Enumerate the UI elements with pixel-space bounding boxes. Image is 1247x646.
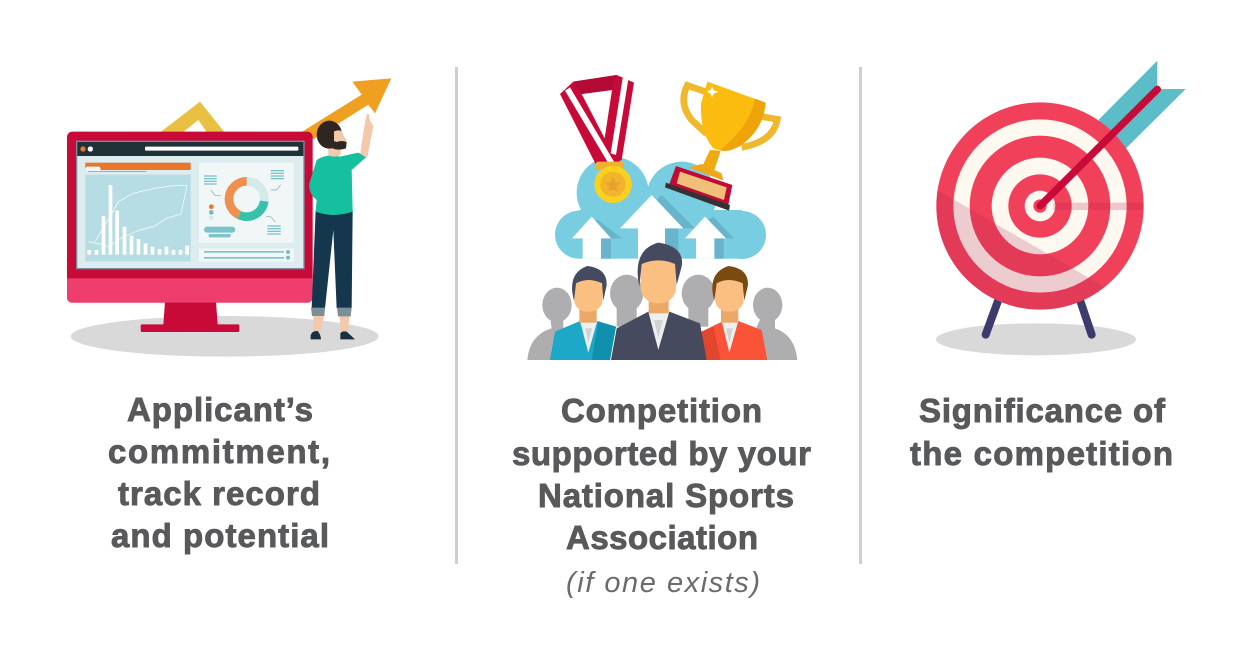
icon: medal, trophy, cloud arrows and people	[527, 75, 797, 360]
list panel	[199, 248, 294, 262]
target legs	[986, 300, 1092, 335]
heading: column one: track record	[118, 475, 320, 512]
heading: column two: Competition	[561, 392, 762, 429]
heading: column one	[108, 391, 330, 554]
arrow fletching	[1099, 61, 1186, 148]
bar and line chart	[85, 163, 191, 261]
floor shadow	[71, 316, 379, 357]
orange rising arrow	[303, 78, 391, 139]
person center in dark suit	[611, 243, 707, 360]
heading: column three: the competition	[910, 435, 1173, 472]
heading: column one: and potential	[111, 517, 329, 554]
arrow shaft	[1040, 89, 1157, 206]
person right in red suit	[702, 266, 767, 360]
heading: column two	[512, 392, 811, 556]
heading: column one: commitment,	[108, 433, 330, 470]
heading: column three: Significance of	[919, 392, 1166, 429]
heading: column two: Association	[566, 519, 758, 556]
icon: target with arrow	[933, 61, 1186, 355]
person left in blue suit	[550, 266, 616, 360]
medal with ribbon	[560, 75, 634, 203]
heading: column three	[910, 392, 1173, 472]
heading: column two: supported by your	[512, 435, 811, 472]
person pointing up	[309, 114, 373, 339]
gray background people	[527, 275, 797, 360]
target rings	[933, 102, 1145, 317]
yellow chevron	[161, 102, 224, 132]
monitor body	[67, 132, 313, 303]
note: if one exists: (if one exists)	[566, 567, 760, 599]
target shadow	[936, 323, 1136, 355]
trophy	[665, 82, 777, 211]
icon: monitor dashboard with person and rising arrow	[67, 78, 391, 357]
heading: column one: Applicant’s	[127, 391, 313, 428]
heading: column two: National Sports	[538, 477, 794, 514]
cloud with arrows	[555, 157, 766, 259]
monitor stand	[141, 302, 239, 332]
donut chart panel	[199, 163, 294, 243]
